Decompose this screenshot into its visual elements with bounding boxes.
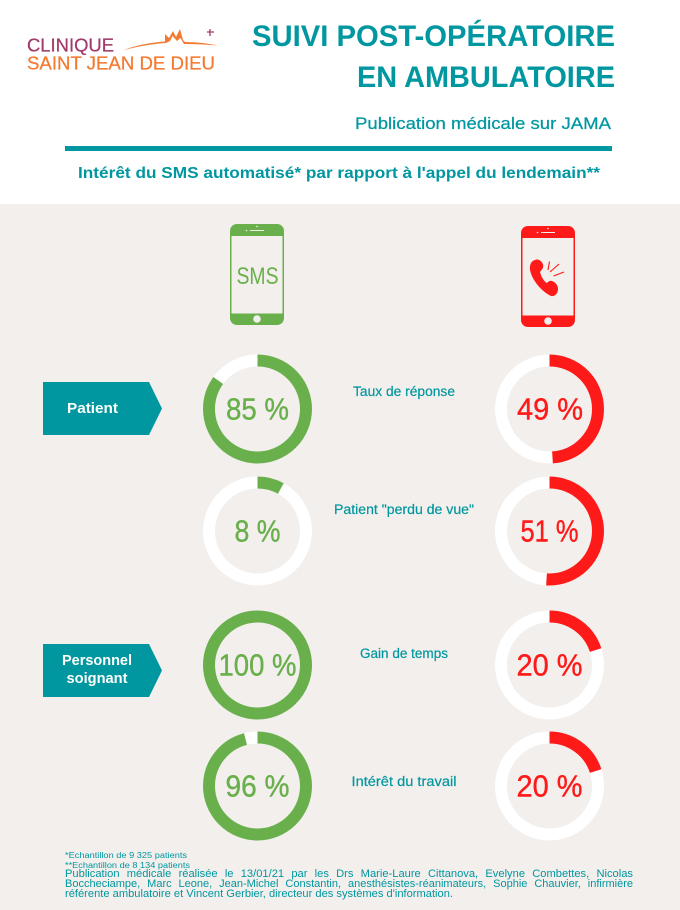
donut: appel intérêt du travail 20% bbox=[501, 738, 598, 834]
icon: green phone with SMS bbox=[230, 224, 284, 325]
donut: SMS taux de réponse 85% bbox=[209, 360, 306, 458]
publication credit: référente ambulatoire et Vincent Gerbier, directeur des systèmes d'information. bbox=[65, 888, 453, 900]
donut: appel taux de réponse 49%: 49 % bbox=[517, 392, 583, 426]
label: Patient: Patient bbox=[67, 401, 118, 417]
logo: Clinique Saint Jean de Dieu: SAINT JEAN DE DIEU bbox=[27, 54, 215, 74]
donut: SMS gain de temps 100% bbox=[209, 616, 306, 714]
donut: appel intérêt du travail 20%: 20 % bbox=[516, 768, 582, 804]
label: Taux de réponse: Taux de réponse bbox=[353, 384, 455, 399]
donut: appel patient perdu de vue 51% bbox=[501, 482, 598, 580]
title bbox=[252, 19, 615, 94]
donut: SMS intérêt du travail 96%: 96 % bbox=[226, 768, 290, 804]
label: Gain de temps: Gain de temps bbox=[360, 646, 448, 661]
label: Personnel soignant: Personnel bbox=[62, 653, 132, 669]
icon: green phone with SMS: SMS bbox=[236, 263, 278, 290]
icon: red phone with ringing handset bbox=[521, 226, 575, 327]
footnotes: *Echantillon de 9 325 patients bbox=[65, 851, 187, 860]
label: Intérêt du travail: Intérêt du travail bbox=[352, 774, 456, 789]
footnotes: **Echantillon de 8 134 patients bbox=[65, 861, 190, 870]
title: SUIVI POST-OPÉRATOIRE bbox=[252, 19, 615, 53]
title: EN AMBULATOIRE bbox=[357, 61, 615, 94]
logo: Clinique Saint Jean de Dieu bbox=[27, 29, 218, 74]
label: Personnel soignant: soignant bbox=[66, 671, 128, 687]
subheading: Intérêt du SMS automatisé* par rapport à l'appel du lendemain** bbox=[78, 165, 601, 182]
donut: SMS patient perdu de vue 8% bbox=[209, 482, 306, 580]
donut: appel taux de réponse 49% bbox=[501, 360, 598, 458]
donut: SMS patient perdu de vue 8%: 8 % bbox=[234, 514, 280, 548]
label: Patient bbox=[43, 382, 162, 435]
footnotes bbox=[65, 851, 190, 870]
donut: SMS taux de réponse 85%: 85 % bbox=[226, 392, 289, 426]
label: Personnel soignant bbox=[43, 644, 162, 697]
donut: appel gain de temps 20% bbox=[501, 616, 598, 714]
publication credit bbox=[65, 868, 634, 900]
donut: appel gain de temps 20%: 20 % bbox=[516, 648, 582, 682]
donut: SMS gain de temps 100%: 100 % bbox=[218, 648, 296, 682]
logo: Clinique Saint Jean de Dieu: CLINIQUE bbox=[27, 36, 114, 56]
label: Patient perdu de vue: Patient "perdu de vue" bbox=[334, 502, 474, 517]
publication credit: Publication médicale réalisée le 13/01/21 par les Drs Marie-Laure Cittanova, Evelyne Combettes, Nicolas bbox=[65, 868, 634, 880]
subtitle: Publication médicale sur JAMA bbox=[355, 114, 612, 133]
donut: SMS intérêt du travail 96% bbox=[209, 738, 306, 834]
donut: appel patient perdu de vue 51%: 51 % bbox=[520, 514, 578, 548]
publication credit: Boccheciampe, Marc Leone, Jean-Michel Constantin, anesthésistes-réanimateurs, Sophie Chauvier, infirmière bbox=[65, 878, 633, 890]
